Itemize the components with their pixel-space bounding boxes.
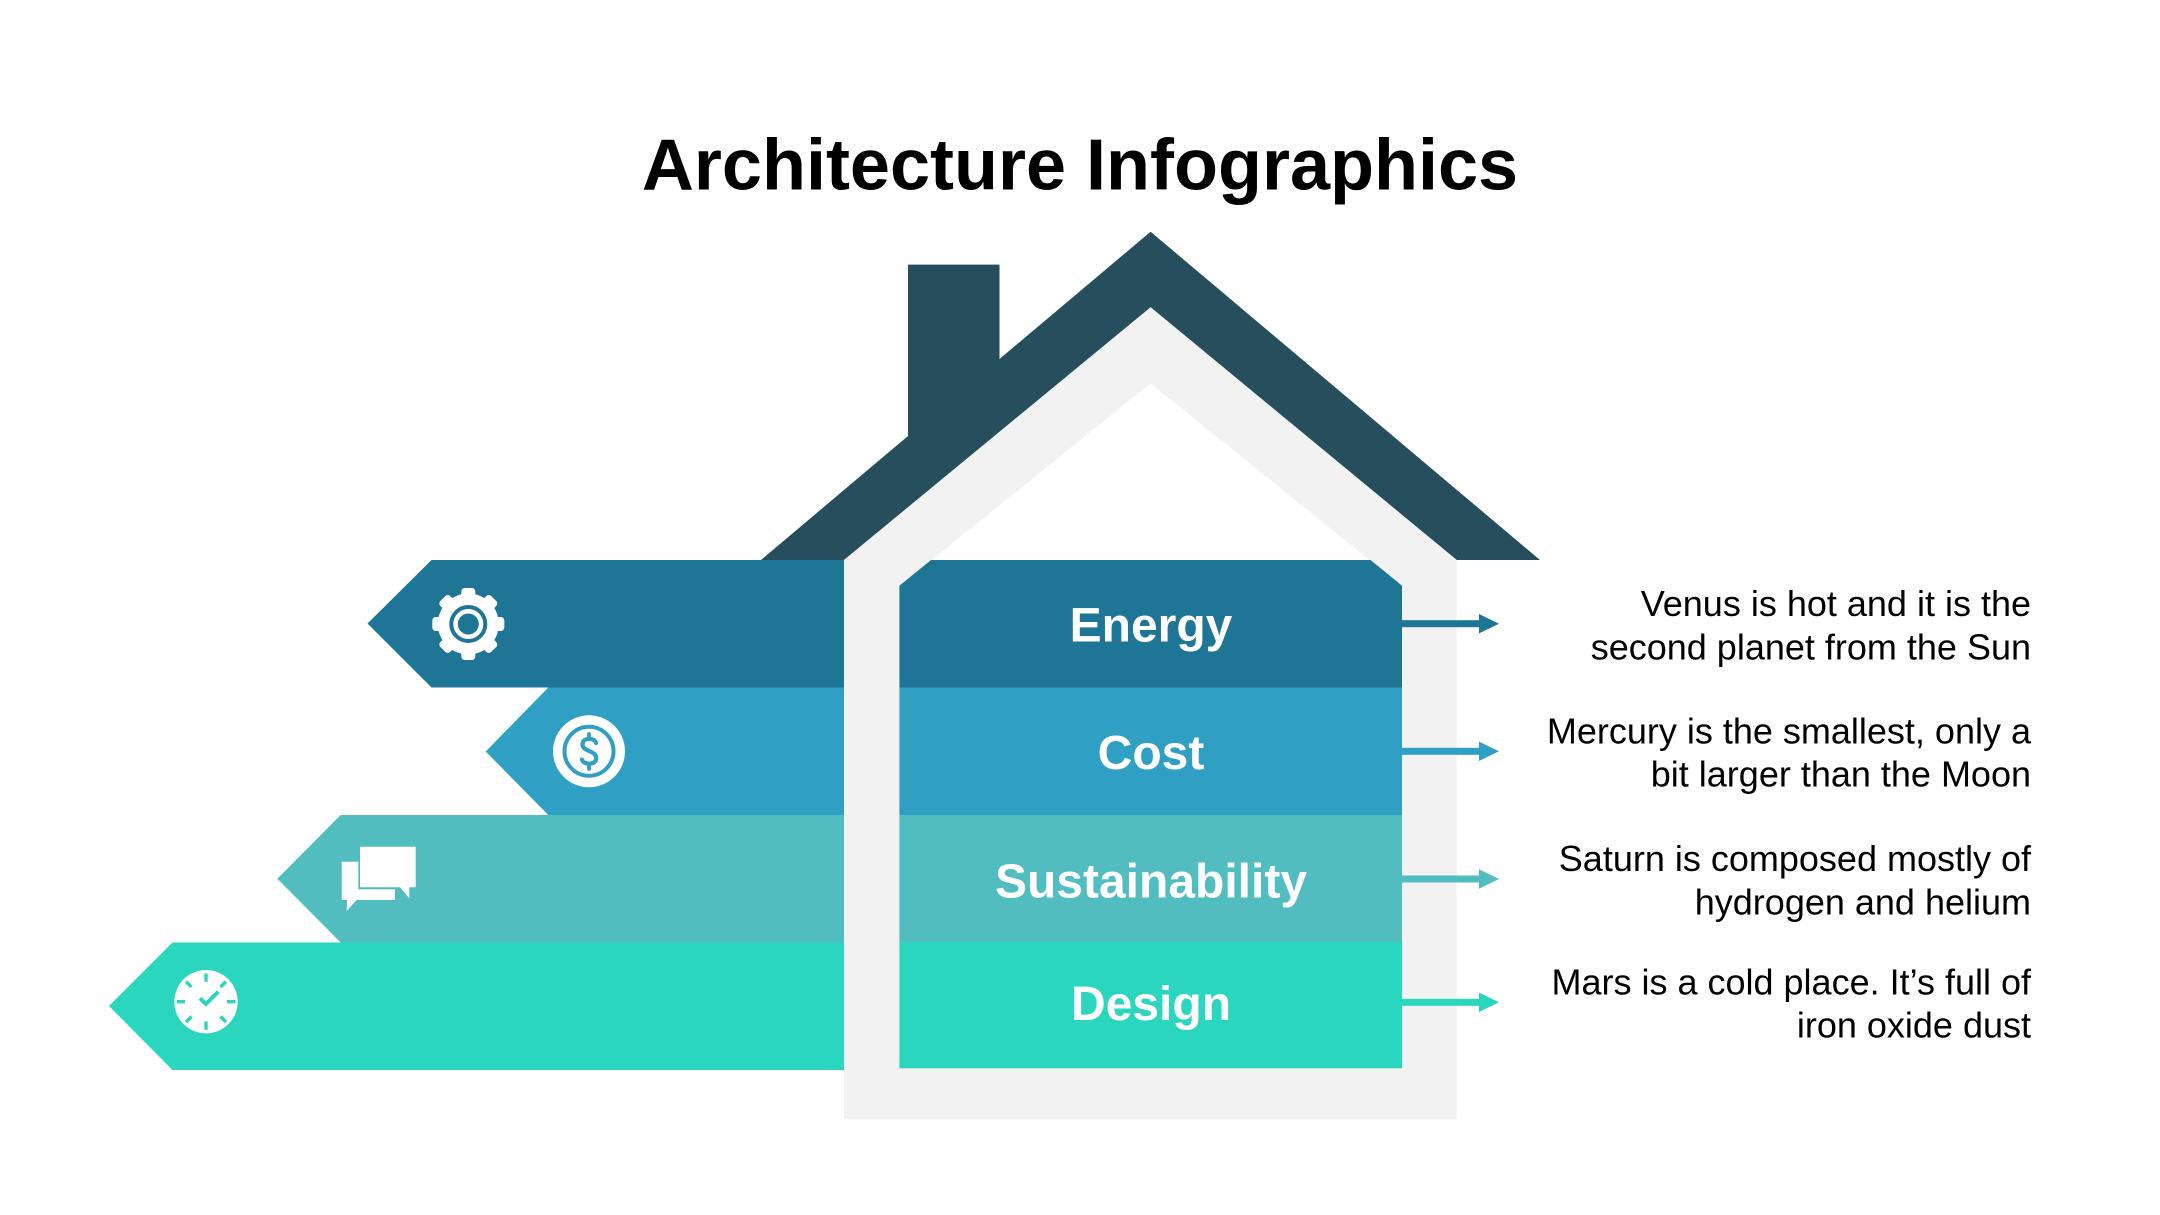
banner arrow: cost — [486, 688, 844, 815]
text block: design description — [1551, 961, 2032, 1046]
floor: design: Design — [1071, 978, 1231, 1031]
text block: cost description: bit larger than the Moon — [1651, 754, 2031, 795]
arrow: cost — [1401, 742, 1499, 761]
text block: energy description: Venus is hot and it is the — [1641, 583, 2031, 624]
text block: energy description: second planet from the Sun — [1591, 626, 2031, 667]
house illustration — [761, 232, 1540, 1119]
text block: design description: Mars is a cold place. It’s full of — [1551, 961, 2032, 1002]
panel: sustainability banner — [277, 815, 844, 942]
roof and chimney — [761, 232, 1540, 560]
title: Architecture Infographics — [642, 126, 1518, 206]
text block: sustainability description — [1559, 838, 2032, 922]
floor: sustainability: Sustainability — [995, 855, 1307, 908]
floor: design — [899, 942, 1402, 1068]
arrow: sustainability — [1401, 869, 1499, 889]
banner arrow: design — [109, 942, 844, 1070]
icon: clock with check — [174, 970, 238, 1033]
house interior attic — [931, 383, 1370, 560]
text block: cost description — [1547, 710, 2032, 795]
text block: design description: iron oxide dust — [1797, 1005, 2031, 1046]
text block: energy description — [1591, 583, 2031, 667]
arrow: energy — [1401, 614, 1499, 633]
floor: energy — [899, 560, 1402, 688]
floor: cost: Cost — [1098, 727, 1204, 780]
text block: sustainability description: hydrogen and helium — [1695, 881, 2031, 922]
house wall — [844, 307, 1457, 1119]
text block: sustainability description: Saturn is composed mostly of — [1559, 838, 2032, 879]
panel: cost banner — [486, 688, 844, 815]
panel: design banner — [109, 942, 844, 1070]
panel: energy banner — [368, 560, 844, 688]
text block: cost description: Mercury is the smallest, only a — [1547, 710, 2032, 751]
icon: gear — [432, 588, 504, 660]
icon: chat bubbles — [342, 845, 416, 911]
panel: house floors — [899, 560, 1402, 1068]
floor: cost — [899, 688, 1402, 815]
floor: sustainability — [899, 815, 1402, 942]
banner arrow: energy — [368, 560, 844, 688]
banner arrow: sustainability — [277, 815, 844, 942]
floor: energy: Energy — [1070, 600, 1233, 653]
arrow: design — [1401, 993, 1499, 1012]
icon: dollar coin — [553, 715, 625, 787]
